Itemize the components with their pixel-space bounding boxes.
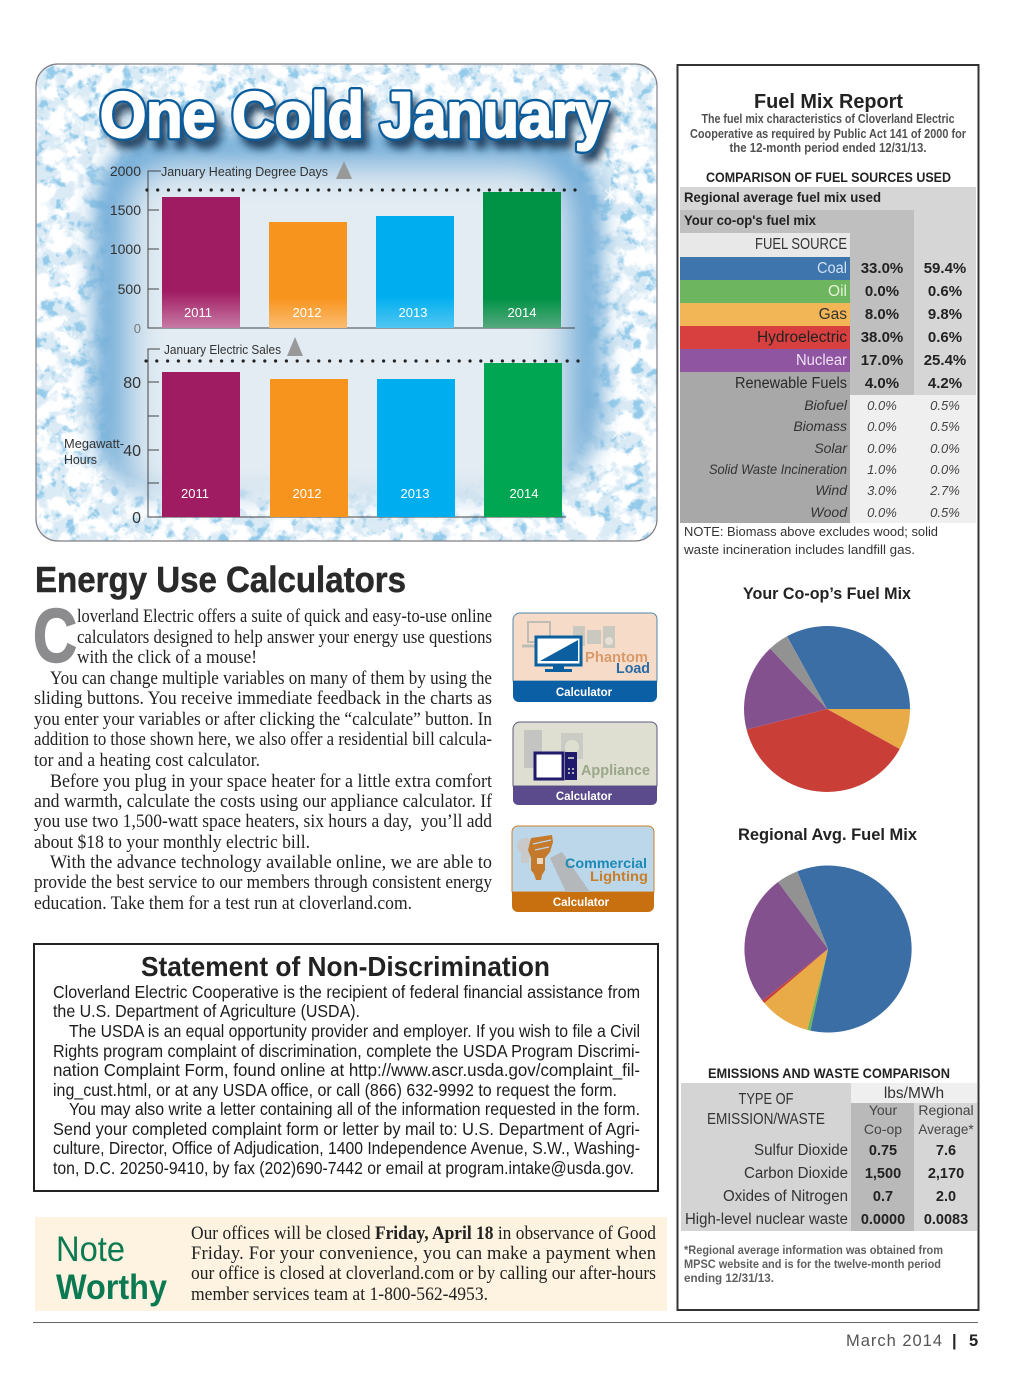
icon: Commercial Lighting calculator button: Calculator [553,897,610,909]
text block: calculators article: You can change multiple variables on many of them by using the [50,669,492,689]
heading: Note Worthy [56,1230,167,1307]
table: fuel sources: 0.0% [930,441,960,456]
table: emissions: lbs/MWh [884,1085,944,1102]
description: Cooperative as required by Public Act 141 of 2000 for [690,127,966,141]
table: fuel sources: 0.0% [867,505,897,520]
chart: January Heating Degree Days: January Heating Degree Days [161,164,328,179]
table: fuel sources: 0.0% [930,462,960,477]
icon: Phantom Load calculator button: Calculator [556,687,613,699]
description [690,112,966,155]
icon: Commercial Lighting calculator button: Lighting [590,868,648,884]
table: fuel sources: Nuclear [796,352,847,369]
icon: Phantom Load calculator button: Phantom [585,650,648,666]
chart: January Electric Sales: 2013 [401,486,429,501]
statement text: Rights program complaint of discrimination, complete the USDA Program Discrimi- [53,1041,640,1061]
table: emissions: 0.7 [873,1189,893,1205]
chart: January Electric Sales [64,337,580,527]
office closure text: our office is closed at cloverland.com or by calling our after-hours [191,1264,656,1284]
footer: | [952,1332,957,1350]
icon: Phantom Load calculator button: Load [616,661,650,677]
table: fuel sources: Wind [815,482,848,498]
text block: calculators article: you enter your variables or after clicking the “calculate” button. In [34,710,492,730]
table: emissions [681,1083,977,1231]
icon: Phantom Load calculator button [513,613,657,702]
footer [33,1322,978,1350]
panel: Statement of Non-Discrimination [34,944,658,1191]
icon: up triangle [336,161,352,179]
text block: calculators article: about $18 to your monthly electric bill. [34,833,310,853]
table: emissions: 7.6 [936,1143,956,1159]
pie chart: your co-op's fuel mix [744,626,910,792]
chart: January Heating Degree Days: 2011 [184,305,212,320]
table: fuel sources: FUEL SOURCE [755,236,847,253]
text block: calculators article: addition to those shown here, we also offer a residential bill calcula- [34,730,492,750]
text block: calculators article: and warmth, calculate the costs using our appliance calculator. If [34,792,493,812]
text block: calculators article: Before you plug in your space heater for a little extra comfort [50,772,493,792]
table: fuel sources: 0.5% [930,398,960,413]
statement text: Cloverland Electric Cooperative is the recipient of federal financial assistance from [53,982,640,1002]
table: fuel sources: Hydroelectric [757,329,847,346]
table: fuel sources: 38.0% [861,329,903,346]
note text: waste incineration includes landfill gas. [683,542,915,557]
pie chart: regional average fuel mix [744,866,912,1033]
table: fuel sources: Gas [819,306,847,323]
title: One Cold January: One Cold January [100,79,608,151]
description: the 12-month period ended 12/31/13. [730,141,926,155]
footnote [684,1243,943,1285]
office closure text [191,1224,657,1305]
heading: Energy Use Calculators: Energy Use Calculators [35,559,406,600]
text block: calculators article: sliding buttons. You receive immediate feedback in the charts as [34,689,492,709]
table: fuel sources: 9.8% [928,306,962,323]
text block: calculators article: loverland Electric offers a suite of quick and easy-to-use online [77,607,492,627]
chart: January Heating Degree Days: 1500 [110,202,141,218]
icon: Commercial Lighting calculator button [512,826,654,912]
chart: January Heating Degree Days: 2012 [293,305,321,320]
chart: January Electric Sales: 2011 [181,486,209,501]
table: fuel sources: Wood [810,504,848,520]
table: fuel sources: 1.0% [867,462,897,477]
statement text: The USDA is an equal opportunity provider and employer. If you wish to file a Civil [69,1021,640,1041]
table: fuel sources: 59.4% [924,260,966,277]
icon: Appliance calculator button: Appliance [581,762,650,779]
table: fuel sources: 0.6% [928,329,962,346]
chart: January Electric Sales: 2012 [293,486,321,501]
table: fuel sources: Solid Waste Incineration [709,461,847,477]
table: fuel sources: 0.0% [867,419,897,434]
table: emissions: 1,500 [865,1166,901,1182]
statement text: You may also write a letter containing all of the information requested in the form. [69,1099,640,1119]
table: fuel sources: 33.0% [861,260,903,277]
table: fuel sources: 4.0% [865,375,899,392]
table: fuel sources: 0.6% [928,283,962,300]
chart: January Heating Degree Days: 1000 [110,241,141,257]
table: fuel sources: 0.5% [930,505,960,520]
table: fuel sources: 0.0% [865,283,899,300]
table: fuel sources: 17.0% [861,352,903,369]
chart: January Heating Degree Days: 500 [118,281,141,297]
table: emissions: Carbon Dioxide [744,1165,848,1182]
text block: calculators article: education. Take them for a test run at cloverland.com. [34,894,412,914]
table: fuel sources: Coal [817,260,847,277]
icon: up triangle [287,337,303,356]
table: emissions: 0.0000 [861,1212,905,1228]
text block: calculators article: With the advance technology available online, we are able to [50,853,492,873]
statement text [53,982,640,1178]
text block: calculators article: calculators designed to help answer your energy use questions [77,628,492,648]
chart: January Heating Degree Days: 2013 [399,305,427,320]
text block: calculators article [33,594,493,914]
chart: January Heating Degree Days [110,161,577,336]
statement text: Send your completed complaint form or letter by mail to: U.S. Department of Agri- [53,1119,640,1139]
table: fuel sources: Regional average fuel mix used [684,189,881,205]
table heading: EMISSIONS AND WASTE COMPARISON [708,1066,950,1081]
icon: Appliance calculator button [513,722,657,805]
footnote: MPSC website and is for the twelve-month period [684,1257,941,1271]
heading: Statement of Non-Discrimination [141,951,550,982]
table: fuel sources: Biofuel [804,397,848,413]
chart: January Electric Sales: 80 [123,375,141,392]
footer: 5 [969,1332,978,1350]
chart: January Electric Sales: 40 [123,443,141,460]
table: emissions: Co-op [864,1121,902,1137]
note text [683,524,938,557]
footnote: ending 12/31/13. [684,1271,774,1285]
office closure text: member services team at 1-800-562-4953. [191,1285,488,1305]
table heading: COMPARISON OF FUEL SOURCES USED [706,170,951,185]
table: emissions: 2.0 [936,1189,956,1205]
table: fuel sources: 0.0% [867,441,897,456]
statement text: nation Complaint Form, found online at http://www.ascr.usda.gov/complaint_fil- [53,1060,640,1081]
office closure text: Friday. For your convenience, you can make a payment when [191,1244,656,1264]
table: fuel sources: Biomass [793,418,847,434]
icon: Appliance calculator button: Calculator [556,791,613,803]
footer: March 2014 [846,1332,942,1350]
table: fuel sources: 8.0% [865,306,899,323]
table: fuel sources: Oil [828,283,847,300]
text block: calculators article: tor and a heating cost calculator. [34,751,260,771]
statement text: ing_cust.html, or at any USDA office, or call (866) 632-9992 to request the form. [53,1080,617,1101]
drop cap: C [33,594,77,679]
table: emissions: Your [869,1102,897,1118]
title: One Cold January: One Cold January [106,88,614,160]
office closure text: Our offices will be closed Friday, April 18 in observance of Good [191,1224,657,1244]
chart: January Heating Degree Days: 2014 [508,305,536,320]
heading: Note Worthy: Worthy [56,1268,167,1307]
table: emissions: High-level nuclear waste [685,1211,848,1228]
table: fuel sources: Solar [814,440,848,456]
table: fuel sources: 0.5% [930,419,960,434]
chart: January Heating Degree Days: 2000 [110,163,141,179]
description: The fuel mix characteristics of Cloverland Electric [702,112,955,126]
chart: January Electric Sales: Megawatt- [64,436,124,451]
table: fuel sources: 4.2% [928,375,962,392]
text block: calculators article: with the click of a mouse! [77,648,257,668]
chart: January Electric Sales: 2014 [510,486,538,501]
chart: January Electric Sales: January Electric Sales [164,343,281,357]
chart: January Electric Sales: 0 [132,510,141,527]
table: emissions: Sulfur Dioxide [754,1142,848,1159]
statement text: ton, D.C. 20250-9410, by fax (202)690-7442 or email at program.intake@usda.gov. [53,1158,634,1178]
text block: calculators article: you use two 1,500-watt space heaters, six hours a day, you’ll add [34,812,493,832]
note text: NOTE: Biomass above excludes wood; solid [684,524,938,539]
heading: Regional Avg. Fuel Mix: Regional Avg. Fuel Mix [738,826,918,844]
table: fuel sources: Renewable Fuels [735,375,847,392]
table: emissions: 0.75 [869,1143,897,1159]
table: emissions: Oxides of Nitrogen [723,1188,848,1205]
statement text: the U.S. Department of Agriculture (USDA). [53,1001,360,1021]
icon: Commercial Lighting calculator button: Commercial [565,855,647,871]
table: emissions: EMISSION/WASTE [707,1111,825,1128]
table: fuel sources [680,187,976,523]
table: fuel sources: Your co-op's fuel mix [684,212,816,228]
footnote: *Regional average information was obtained from [684,1243,943,1257]
table: emissions: 2,170 [928,1166,964,1182]
table: emissions: Regional [918,1102,974,1118]
panel: Fuel Mix Report [678,65,978,1310]
chart: January Electric Sales: Hours [64,452,97,467]
table: fuel sources: 2.7% [929,483,960,498]
table: emissions: TYPE OF [738,1091,794,1108]
table: emissions: 0.0083 [924,1212,968,1228]
statement text: culture, Director, Office of Adjudication, 1400 Independence Avenue, S.W., Washing- [53,1138,640,1158]
table: fuel sources: 3.0% [867,483,897,498]
chart: January Heating Degree Days: 0 [134,321,141,336]
table: fuel sources: 0.0% [867,398,897,413]
title: One Cold January: One Cold January [100,79,608,151]
table: fuel sources: 25.4% [924,352,966,369]
panel: One Cold January [36,64,657,541]
panel: Note Worthy [35,1217,667,1311]
text block: calculators article: provide the best service to our members through consistent energy [34,873,493,893]
heading: Fuel Mix Report: Fuel Mix Report [754,90,903,113]
heading: Your Co-op's Fuel Mix: Your Co-op’s Fuel Mix [743,585,912,603]
heading: Note Worthy: Note [56,1230,125,1269]
table: emissions: Average* [918,1122,974,1137]
